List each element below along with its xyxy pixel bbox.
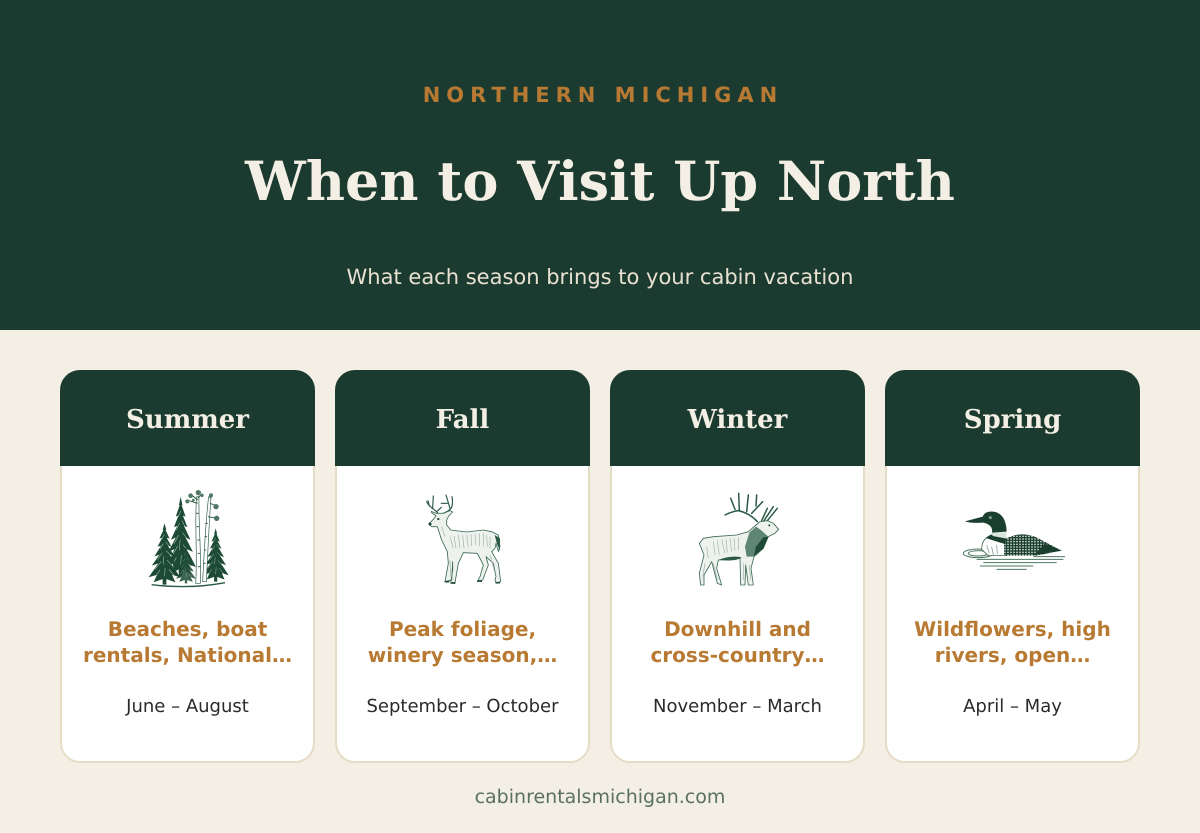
icon: loon: [962, 512, 1065, 570]
summer dates: June – August: [126, 696, 249, 717]
panel: winter: [610, 370, 865, 763]
icon: elk: [698, 492, 780, 586]
spring highlights: rivers, open…: [935, 643, 1090, 667]
header band: [0, 0, 1200, 330]
winter heading: Winter: [688, 405, 787, 435]
winter highlights: Downhill and: [664, 617, 811, 641]
winter highlights: cross-country…: [650, 643, 825, 667]
title: When to Visit Up North: [245, 149, 955, 213]
winter header: [610, 370, 865, 466]
winter highlights: [650, 617, 825, 667]
fall header: [335, 370, 590, 466]
summer highlights: [83, 617, 292, 667]
spring highlights: [914, 617, 1111, 667]
eyebrow: NORTHERN MICHIGAN: [423, 83, 783, 107]
summer heading: Summer: [126, 405, 249, 435]
panel: fall: [335, 370, 590, 763]
fall heading: Fall: [436, 405, 489, 435]
fall dates: September – October: [366, 696, 558, 717]
icon: deer: [426, 494, 502, 584]
fall highlights: winery season,…: [368, 643, 557, 667]
summer highlights: rentals, National…: [83, 643, 292, 667]
spring dates: April – May: [963, 696, 1062, 717]
subtitle: What each season brings to your cabin vacation: [347, 265, 853, 289]
spring heading: Spring: [964, 405, 1061, 435]
fall highlights: [368, 617, 557, 667]
icon: trees: [148, 490, 229, 588]
summer header: [60, 370, 315, 466]
spring highlights: Wildflowers, high: [914, 617, 1111, 641]
summer highlights: Beaches, boat: [108, 617, 267, 641]
spring header: [885, 370, 1140, 466]
panel: spring: [885, 370, 1140, 763]
footer url: cabinrentalsmichigan.com: [475, 786, 725, 808]
panel: summer: [60, 370, 315, 763]
winter dates: November – March: [653, 696, 822, 717]
fall highlights: Peak foliage,: [389, 617, 536, 641]
